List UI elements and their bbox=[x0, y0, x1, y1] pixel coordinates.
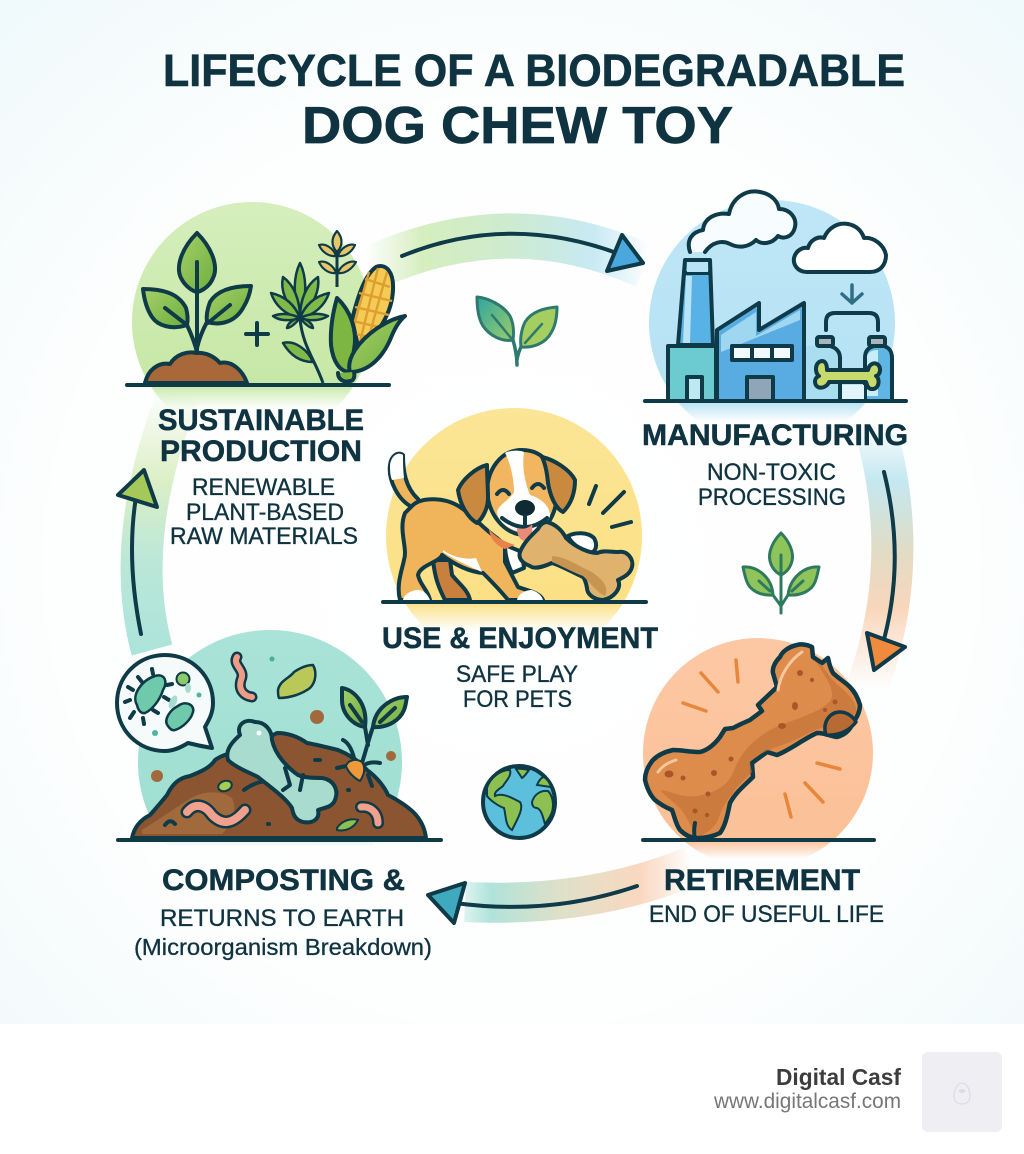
icon: teal sprout bbox=[477, 297, 557, 365]
heading: sustainable production bbox=[158, 404, 364, 468]
ground line bbox=[118, 838, 441, 842]
ground line bbox=[383, 600, 646, 604]
ground line bbox=[645, 399, 906, 403]
ground line bbox=[643, 838, 874, 842]
description: safe play: FOR PETS bbox=[463, 686, 572, 713]
heading: retirement: RETIREMENT bbox=[664, 864, 860, 897]
icon: decaying leaf bbox=[278, 665, 315, 698]
description: non-toxic processing: PROCESSING bbox=[698, 484, 846, 511]
icon: smoke cloud bbox=[689, 191, 795, 252]
icon: large worm bbox=[187, 806, 245, 822]
description: safe play bbox=[456, 661, 578, 713]
icon: corn bbox=[331, 266, 405, 382]
panel: retirement bbox=[643, 638, 884, 928]
description: non-toxic processing bbox=[698, 459, 846, 511]
heading: composting: COMPOSTING & bbox=[162, 864, 405, 897]
brand name: Digital Casf bbox=[776, 1064, 901, 1090]
arrow: production to manufacturing bbox=[372, 234, 645, 271]
heading: manufacturing: MANUFACTURING bbox=[642, 419, 908, 452]
heading: sustainable production: SUSTAINABLE bbox=[158, 404, 364, 437]
icon: tanks and bone bbox=[806, 285, 892, 401]
icon: seedling bbox=[143, 233, 251, 383]
description: end of useful life: END OF USEFUL LIFE bbox=[649, 901, 884, 928]
footer: brand bbox=[713, 1052, 1002, 1132]
icon: plus sign bbox=[246, 323, 268, 345]
description: safe play: SAFE PLAY bbox=[456, 661, 578, 688]
icon: floating worm bbox=[236, 657, 252, 697]
icon: sprout bbox=[342, 688, 407, 763]
icon: green sprout bbox=[743, 533, 819, 613]
icon: small worm bbox=[361, 807, 378, 823]
description: non-toxic processing: NON-TOXIC bbox=[707, 459, 836, 486]
icon: breaking bone bbox=[227, 721, 336, 822]
title: DOG CHEW TOY bbox=[302, 97, 733, 155]
arrow: composting to production bbox=[118, 395, 178, 650]
worm fill bbox=[236, 657, 252, 697]
description: raw materials: PLANT-BASED bbox=[186, 499, 344, 526]
description: raw materials bbox=[170, 474, 358, 550]
icon: cloud bbox=[794, 224, 886, 272]
icon: wheat bbox=[319, 231, 356, 287]
arrow: retirement to composting bbox=[428, 866, 692, 923]
yellow circle bbox=[386, 408, 642, 664]
description: raw materials: RAW MATERIALS bbox=[170, 523, 358, 550]
icon: earth globe bbox=[483, 766, 555, 838]
icon: orange beetle bbox=[337, 740, 380, 786]
blue circle bbox=[649, 200, 895, 446]
ground line bbox=[127, 383, 389, 387]
panel: manufacturing bbox=[642, 191, 908, 511]
compost particles bbox=[151, 656, 396, 782]
brand logo tile bbox=[922, 1052, 1002, 1132]
heading: sustainable production: PRODUCTION bbox=[160, 435, 362, 468]
arrow: manufacturing to retirement bbox=[866, 420, 905, 690]
icon: factory bbox=[668, 260, 804, 401]
title: LIFECYCLE OF A BIODEGRADABLE bbox=[163, 45, 905, 96]
description: returns to earth: RETURNS TO EARTH bbox=[160, 905, 404, 932]
teal circle bbox=[138, 630, 402, 894]
description: raw materials: RENEWABLE bbox=[192, 474, 335, 501]
panel: composting bbox=[117, 630, 441, 960]
title bbox=[163, 45, 905, 155]
heading: use and enjoyment: USE & ENJOYMENT bbox=[382, 622, 658, 655]
compost bits bbox=[217, 779, 358, 831]
description: returns to earth: (Microorganism Breakdown) bbox=[134, 934, 432, 960]
panel: use and enjoyment bbox=[382, 408, 658, 713]
description: returns to earth bbox=[134, 905, 432, 960]
icon: microbe speech bubble bbox=[117, 655, 213, 751]
icon: dog with bone bbox=[390, 450, 632, 600]
icon: radiating marks bbox=[683, 660, 840, 817]
panel: sustainable production bbox=[127, 202, 405, 550]
green circle bbox=[132, 202, 372, 442]
icon: hemp plant bbox=[271, 263, 329, 383]
icon: compost pile bbox=[132, 733, 426, 838]
icon: worn chewed bone bbox=[645, 644, 860, 838]
orange circle bbox=[643, 638, 873, 868]
brand url: www.digitalcasf.com bbox=[713, 1090, 901, 1113]
